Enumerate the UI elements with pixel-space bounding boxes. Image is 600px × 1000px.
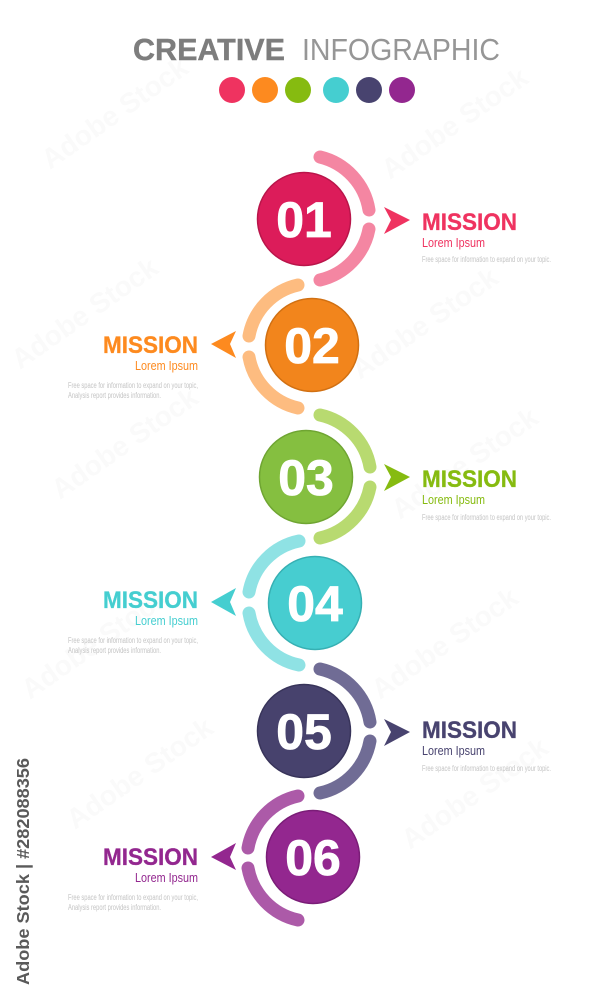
- step 05 text: Free space for information to expand on your topic.: [422, 764, 551, 773]
- step 02 text: Free space for information to expand on your topic,: [68, 381, 198, 390]
- step 01 text: [422, 209, 551, 264]
- step 04 text: Free space for information to expand on your topic,: [68, 636, 198, 645]
- step 01: [258, 157, 551, 280]
- text: Adobe Stock: [36, 51, 194, 175]
- step 03 text: Free space for information to expand on your topic.: [422, 513, 551, 522]
- step 02 circle: [266, 298, 358, 392]
- step 06 arrow: [211, 843, 236, 870]
- text: Adobe Stock: [396, 731, 554, 855]
- step 04 arrow: [211, 588, 236, 616]
- text: Adobe Stock: [61, 711, 219, 835]
- step 01 text: Lorem Ipsum: [422, 236, 485, 250]
- step 04 text: Lorem Ipsum: [135, 614, 198, 628]
- step 03 text: [422, 466, 551, 522]
- step 05 text: [422, 717, 551, 773]
- step 02 text: MISSION: [103, 332, 198, 359]
- step 02 number: 02: [284, 318, 340, 374]
- step 04 number: 04: [287, 576, 343, 632]
- step 05 circle: [258, 684, 350, 778]
- step 02 arcs: [249, 285, 298, 408]
- step 06 text: Lorem Ipsum: [135, 871, 198, 885]
- step 02 text: [68, 332, 198, 400]
- step 01 circle: [258, 172, 350, 266]
- text: Adobe Stock: [386, 401, 544, 525]
- step 04: [68, 541, 362, 665]
- text: Adobe Stock: [376, 61, 534, 185]
- step 06 text: [68, 844, 198, 912]
- step 06 text: Analysis report provides information.: [68, 903, 161, 912]
- step 03 text: MISSION: [422, 466, 517, 493]
- step 06 circle: [266, 810, 360, 904]
- step 05 text: MISSION: [422, 717, 517, 744]
- step 02 text: Lorem Ipsum: [135, 359, 198, 373]
- step 03 arrow: [384, 464, 410, 491]
- step 03 circle: [260, 430, 352, 524]
- text: Adobe Stock: [46, 381, 204, 505]
- step 05 arcs: [320, 669, 370, 793]
- step 05 arrow: [384, 719, 410, 746]
- step 05 text: Lorem Ipsum: [422, 744, 485, 758]
- title: INFOGRAPHIC: [302, 32, 500, 67]
- step 02 arrow: [211, 331, 236, 358]
- step 06 number: 06: [285, 830, 341, 886]
- step 04 text: Analysis report provides information.: [68, 646, 161, 655]
- text: Adobe Stock: [16, 581, 174, 705]
- step 06: [68, 796, 360, 920]
- text: Adobe Stock: [6, 251, 164, 375]
- step 01 text: MISSION: [422, 209, 517, 236]
- step 03: [260, 415, 551, 538]
- step 06 text: Free space for information to expand on your topic,: [68, 893, 198, 902]
- colour dots legend: [219, 77, 415, 103]
- step 04 circle: [268, 556, 362, 650]
- step 02: [68, 285, 358, 408]
- step 01 arrow: [384, 207, 410, 234]
- step 05: [258, 669, 551, 793]
- step 06 arcs: [248, 796, 298, 920]
- step 04 text: [68, 587, 198, 655]
- step 03 arcs: [320, 415, 370, 538]
- text: Adobe Stock: [346, 261, 504, 385]
- stock id vertical label: Adobe Stock | #282088356: [13, 758, 33, 985]
- step 04 text: MISSION: [103, 587, 198, 614]
- step 01 number: 01: [276, 192, 332, 248]
- step 04 arcs: [249, 541, 299, 665]
- step 02 text: Analysis report provides information.: [68, 391, 161, 400]
- step 03 number: 03: [278, 450, 334, 506]
- step 01 arcs: [320, 157, 369, 280]
- title: CREATIVE: [133, 32, 285, 67]
- text: Adobe Stock: [366, 581, 524, 705]
- step 01 text: Free space for information to expand on your topic.: [422, 255, 551, 264]
- step 05 number: 05: [276, 704, 332, 760]
- title: [133, 32, 500, 67]
- step 06 text: MISSION: [103, 844, 198, 871]
- step 03 text: Lorem Ipsum: [422, 493, 485, 507]
